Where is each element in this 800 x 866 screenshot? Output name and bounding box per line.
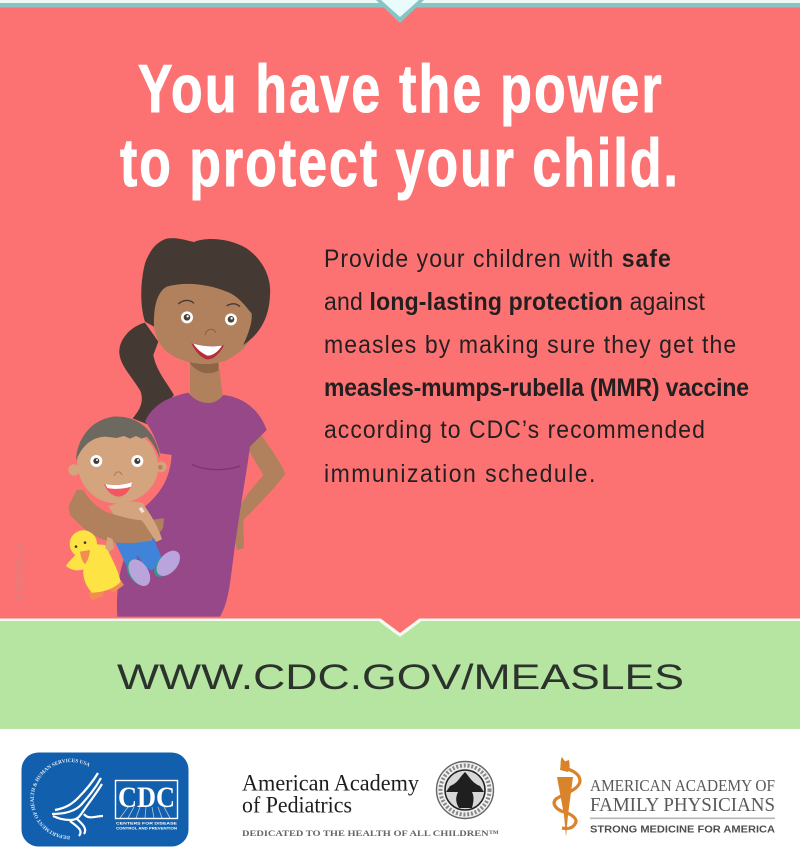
logo: HHS and CDC: CENTERS FOR DISEASE [116, 822, 178, 826]
panel: green website band [0, 621, 800, 729]
text block: vaccine message: Provide your children with safe [324, 245, 671, 273]
text block: vaccine message: measles-mumps-rubella (MMR) vaccine [324, 374, 749, 402]
baby hair [76, 417, 160, 461]
baby head [77, 428, 158, 503]
logo: American Academy of Pediatrics: DEDICATED TO THE HEALTH OF ALL CHILDREN™ [242, 828, 499, 838]
mother hair [141, 238, 270, 345]
duck [66, 530, 124, 600]
logo: HHS and CDC: CONTROL AND PREVENTION [116, 826, 177, 830]
logo: American Academy of Pediatrics [242, 762, 499, 838]
baby eyes [90, 455, 102, 467]
title: You have the power [138, 50, 662, 127]
baby body [108, 502, 152, 542]
panel: pink background [0, 7, 800, 619]
mother face [153, 277, 254, 364]
website url: WWW.CDC.GOV/MEASLES [117, 658, 684, 697]
HHS eagle icon [52, 773, 103, 836]
baby smile [104, 481, 132, 497]
text block: vaccine message: immunization schedule. [324, 460, 595, 488]
top band with notch [0, 0, 800, 23]
vertical code: CS254521-A [14, 542, 26, 600]
baby legs and shoes [115, 538, 163, 571]
CDC box [116, 780, 178, 818]
logo: American Academy of Pediatrics: of Pediatrics [242, 792, 352, 818]
text block: vaccine message [324, 245, 749, 488]
text block: vaccine message: and long-lasting protection against [324, 288, 705, 316]
HHS seal text [34, 762, 95, 836]
notch between pink and green [0, 618, 800, 637]
mother eyes [181, 311, 193, 323]
mother arm right [233, 428, 285, 550]
logo: HHS and CDC [22, 752, 188, 846]
logo: HHS and CDC: CDC [118, 781, 175, 814]
logo: HHS and CDC: DEPARTMENT OF HEALTH & HUMAN SERVICES USA [30, 758, 90, 840]
illustration: mother, baby and duck [66, 238, 285, 617]
title [120, 50, 678, 201]
baby hand [105, 537, 114, 552]
logo: American Academy of Family Physicians: FAMILY PHYSICIANS [590, 794, 775, 816]
mother chin shadow [190, 362, 218, 373]
baby arm [136, 503, 162, 542]
mother smile [191, 343, 224, 359]
mother ponytail [119, 323, 174, 424]
mother dress [117, 393, 267, 617]
AAFP staff and snake icon [554, 757, 580, 837]
logo: American Academy of Pediatrics: American Academy [242, 770, 419, 796]
title: to protect your child. [120, 124, 678, 201]
logo: American Academy of Family Physicians: AMERICAN ACADEMY OF [590, 776, 775, 795]
text block: vaccine message: according to CDC’s recommended [324, 416, 705, 444]
text block: vaccine message: measles by making sure they get the [324, 331, 736, 359]
AAP seal [436, 762, 494, 818]
baby ears [68, 464, 80, 476]
logo: American Academy of Family Physicians: STRONG MEDICINE FOR AMERICA [590, 824, 775, 836]
mother arm holding baby [68, 490, 164, 543]
logo: American Academy of Family Physicians [554, 757, 775, 837]
mother neck [190, 360, 223, 407]
